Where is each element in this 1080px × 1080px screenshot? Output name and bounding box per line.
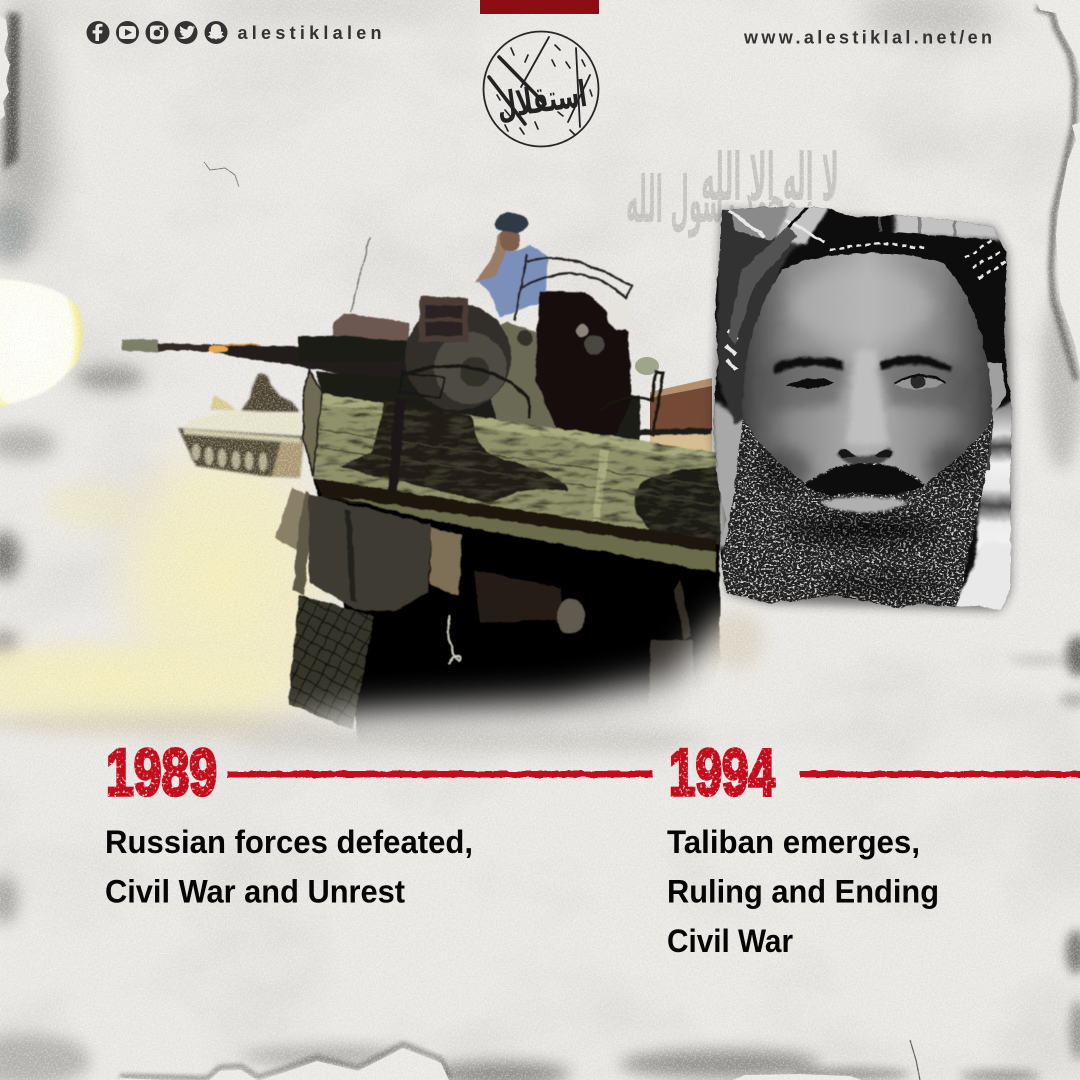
portrait [700,200,1025,620]
tire [288,595,374,730]
bed latch bar [387,398,406,500]
mud flap [274,487,306,550]
gun mount and drum [400,296,562,430]
rear plate [332,312,410,342]
front tire side [293,490,314,596]
timeline rule [228,771,653,778]
truck with anti-aircraft gun [122,213,720,745]
timeline: 1989 [105,735,653,910]
burn top right [1036,8,1076,380]
rag on axle [557,599,585,633]
top red tab [480,0,599,14]
eyebrows [773,357,843,374]
ear [985,362,1006,415]
social icons [86,21,228,44]
eyes [786,378,834,388]
Taliban flag calligraphy [626,141,839,238]
description 1989: Civil War and Unrest [105,874,405,910]
outer paper top right [1035,0,1080,380]
muzzle flash [0,279,83,408]
wire [448,615,460,664]
logo: calligraphic roundel [484,32,598,146]
description 1994: Ruling and Ending [667,874,939,910]
icon: facebook [86,21,110,44]
website url: www.alestiklal.net/en [743,28,992,48]
right shawl [950,400,1014,612]
description 1994: Civil War [667,923,793,959]
face [742,253,993,490]
logo: calligraphic roundel: استقلال [494,74,589,127]
distant tank [178,374,304,478]
outer paper bottom [120,1048,450,1080]
beard shading [759,443,974,597]
background wall and trees [635,357,712,462]
nose [836,447,894,467]
rear chassis [313,478,720,745]
right machinery [535,291,712,436]
year 1989: 1989 [106,735,217,809]
burn along bottom tear [120,1044,450,1078]
beard [722,417,993,608]
mustache [805,464,925,496]
axle parts [474,570,565,622]
side rack [304,369,322,476]
camouflage [340,400,569,504]
truck bed [313,394,720,545]
icon: snapchat [204,21,228,44]
gun barrel [120,334,410,380]
rear differential [648,639,694,698]
social handle: alestiklalen [238,23,382,43]
outer strip left [0,14,10,122]
portrait background and turban [705,200,1025,620]
sandy ground [0,410,765,752]
Taliban flag calligraphy: لا إله إلا الله [701,141,839,216]
timeline: 1994 [667,735,1080,959]
antenna [351,237,370,312]
mudguard [309,494,431,612]
shawl corner [955,542,1012,610]
deck shadow behind gun [315,370,642,441]
description 1994: Taliban emerges, [667,824,920,860]
gunner figure [475,213,548,318]
icon: twitter [174,21,198,44]
burn left [4,12,20,170]
timeline rule [800,771,1080,778]
handlebar frame [515,254,632,320]
year 1994: 1994 [669,735,775,809]
description 1989: Russian forces defeated, [105,824,473,860]
lips [820,497,908,512]
icon: instagram [146,21,168,44]
icon: youtube [116,21,139,44]
Taliban flag calligraphy: محمد رسول الله [626,163,798,238]
